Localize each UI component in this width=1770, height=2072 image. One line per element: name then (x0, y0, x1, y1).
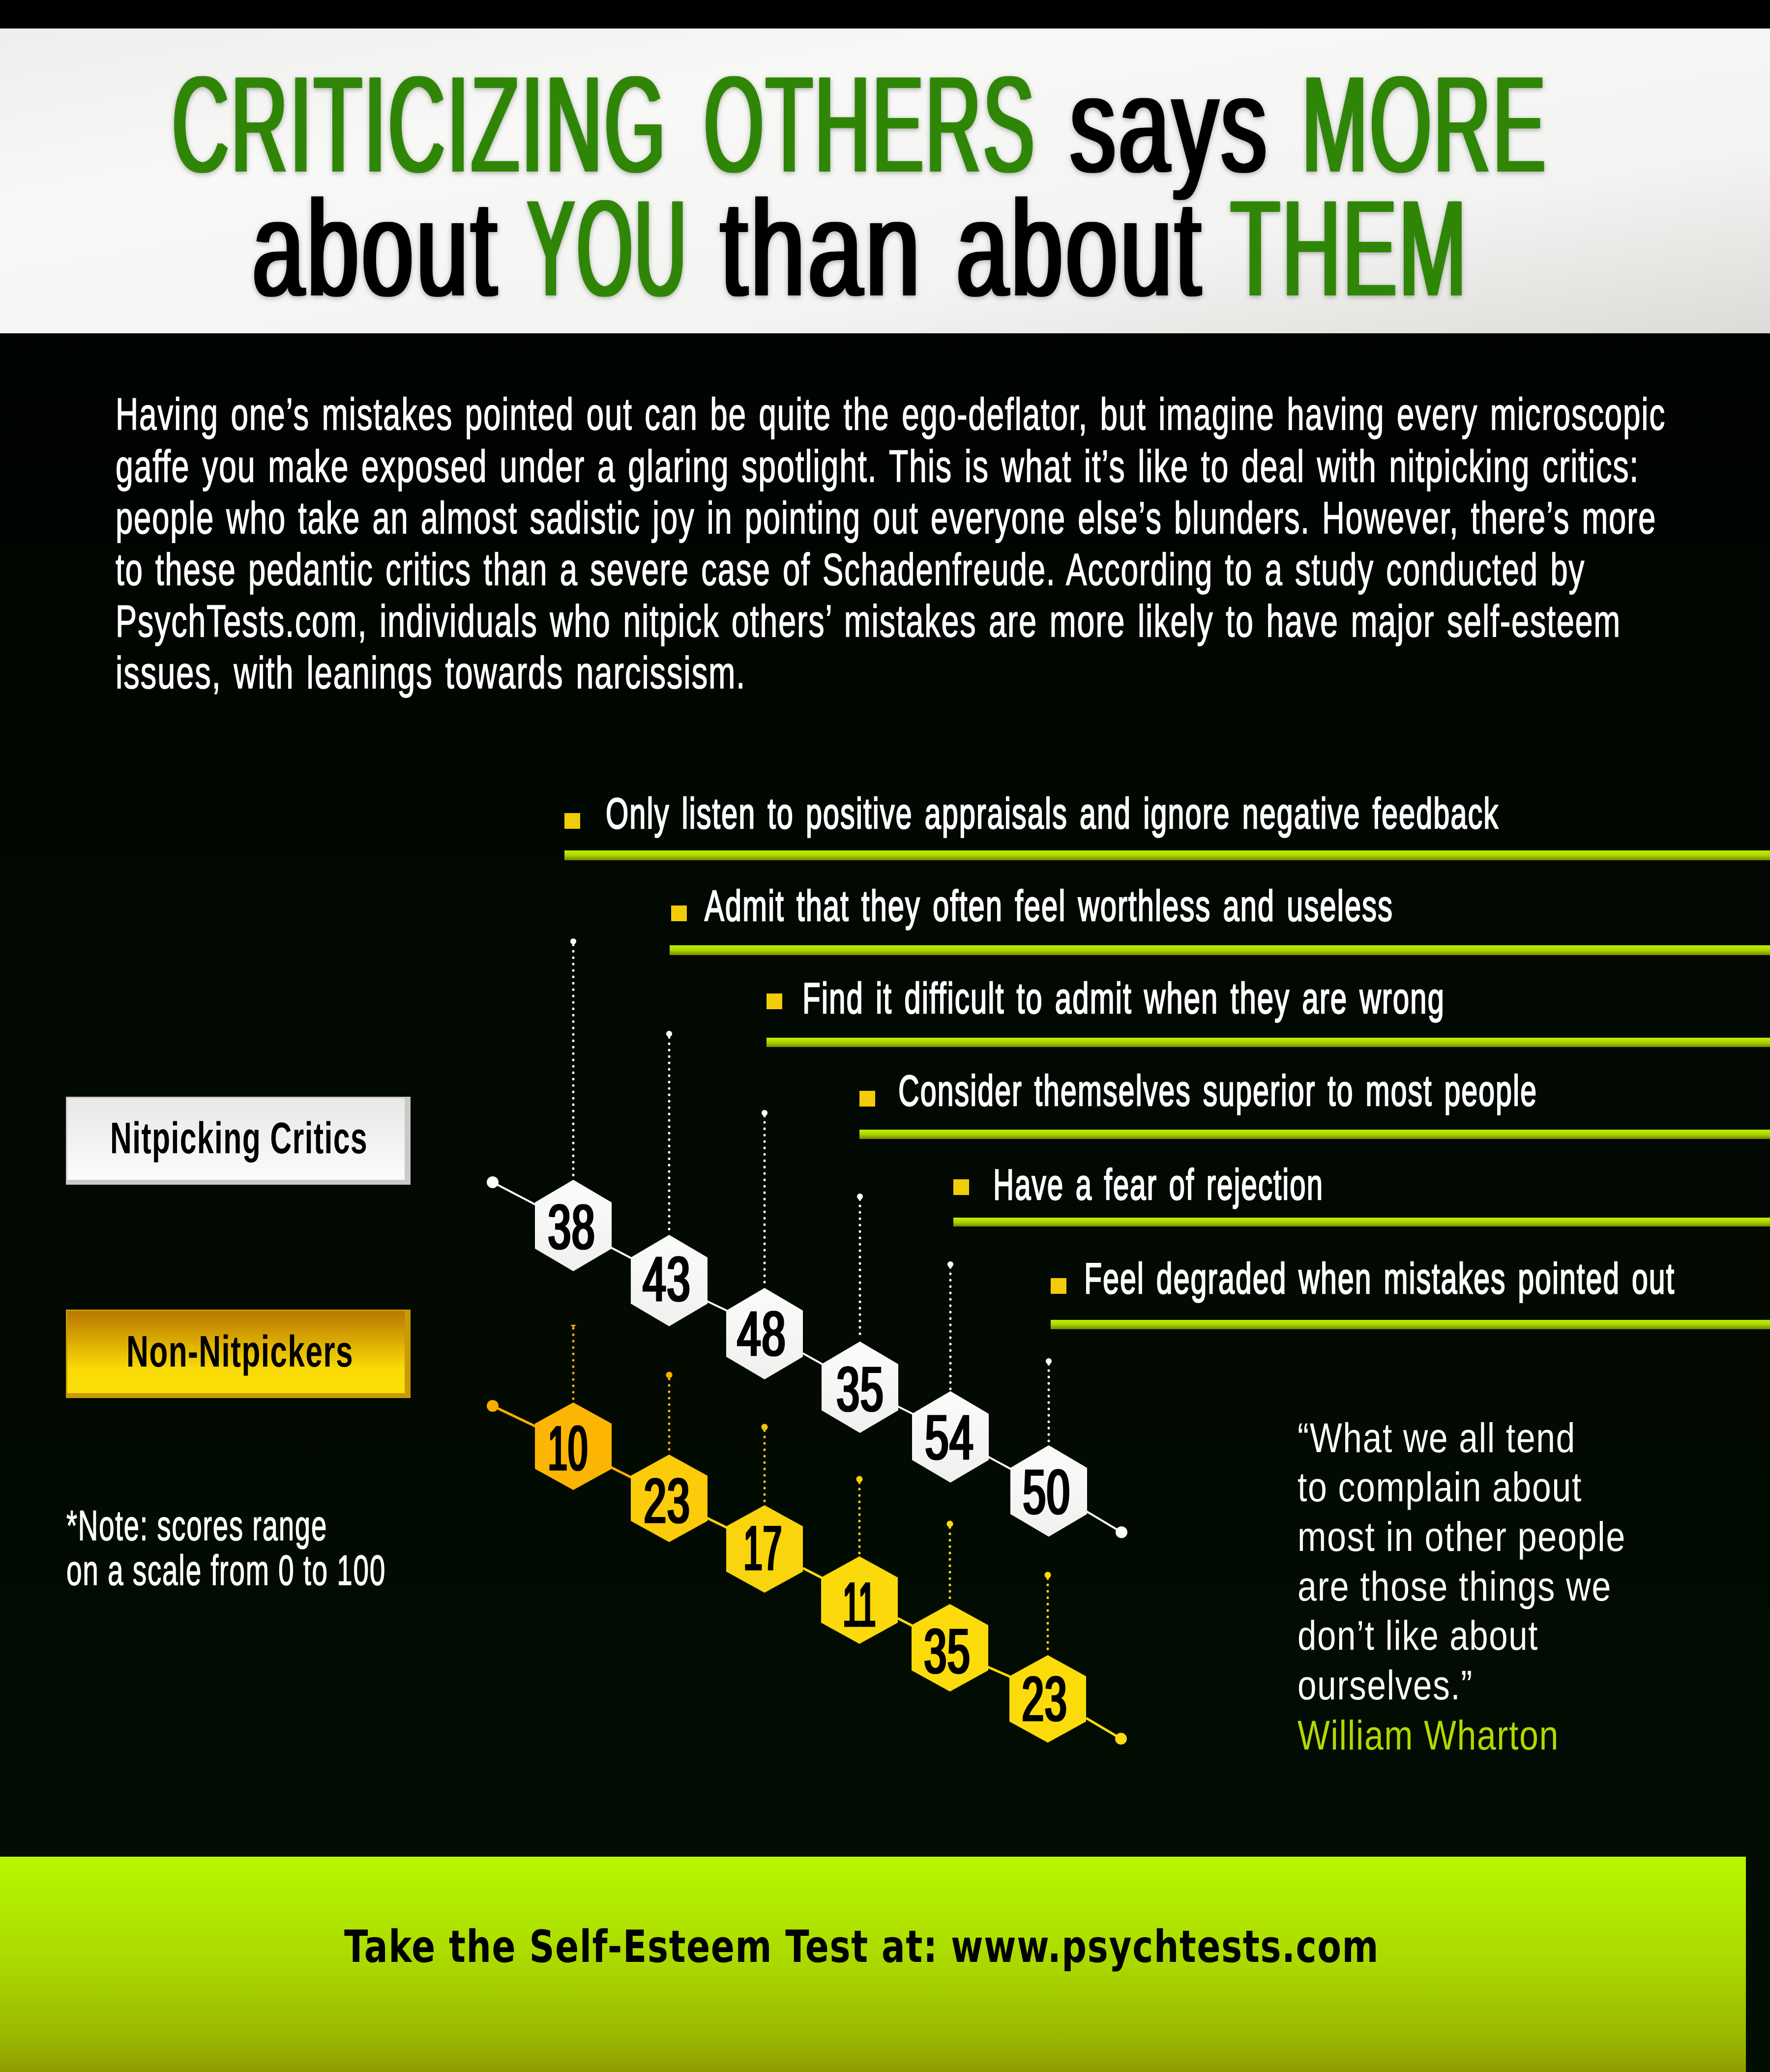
hexagon: 35 (912, 1604, 988, 1692)
hexagon: 43 (631, 1235, 708, 1326)
scale note: *Note: scores range (66, 1502, 327, 1549)
title text: YOU (527, 172, 688, 324)
title text: OTHERS (704, 48, 1036, 201)
title text: CRITICIZING (172, 48, 668, 201)
hexagon: 54 (912, 1391, 989, 1483)
quote: ourselves.” (1298, 1662, 1473, 1708)
legend: nitpicking critics (66, 1097, 411, 1185)
trait 4 (859, 1066, 1770, 1139)
footer banner (0, 1857, 1746, 2072)
hexagon: 35 (822, 1342, 898, 1433)
legend: nitpicking critics: Nitpicking Critics (110, 1114, 368, 1163)
scale note (66, 1502, 386, 1594)
title text (172, 48, 1548, 324)
title text: THEM (1231, 172, 1469, 324)
scale note: on a scale from 0 to 100 (66, 1547, 386, 1594)
hexagon: 23: 23 (1022, 1664, 1068, 1734)
trait 1 (564, 789, 1770, 860)
chart: non-nitpickers series (487, 1325, 1127, 1745)
hexagon: 23: 23 (644, 1466, 691, 1536)
quote: are those things we (1298, 1563, 1612, 1609)
hexagon: 48 (726, 1288, 803, 1379)
intro paragraph (116, 389, 1666, 698)
trait 6 (1051, 1254, 1770, 1329)
quote: “What we all tend (1298, 1415, 1576, 1461)
quote (1298, 1415, 1626, 1758)
call to action: Take the Self-Esteem Test at: www.psychtests.com (344, 1921, 1379, 1973)
hexagon: 23 (1009, 1655, 1086, 1743)
title banner (0, 29, 1770, 333)
intro paragraph: issues, with leanings towards narcissism. (116, 648, 746, 698)
hexagon: 17 (726, 1505, 803, 1593)
quote: most in other people (1298, 1514, 1626, 1560)
hexagon: 23 (631, 1455, 708, 1542)
hexagon: 35: 35 (924, 1616, 971, 1686)
quote: to complain about (1298, 1464, 1582, 1510)
hexagon: 10 (535, 1402, 612, 1490)
quote: don’t like about (1298, 1612, 1538, 1659)
legend: non-nitpickers (66, 1310, 411, 1398)
hexagon: 10: 10 (548, 1413, 589, 1483)
title text: than (720, 172, 923, 324)
trait 5: Have a fear of rejection (993, 1160, 1324, 1209)
hexagon: 48: 48 (738, 1299, 787, 1369)
hexagon: 54: 54 (925, 1402, 974, 1472)
title text: about (252, 172, 500, 324)
trait 2: Admit that they often feel worthless and useless (705, 881, 1393, 930)
hexagon: 38 (535, 1180, 612, 1271)
title text: about (956, 172, 1204, 324)
trait 5 (953, 1160, 1770, 1226)
legend: non-nitpickers: Non-Nitpickers (126, 1327, 354, 1376)
hexagon: 35: 35 (837, 1354, 885, 1424)
chart: nitpicking critics series (487, 938, 1127, 1538)
hexagon: 38: 38 (548, 1192, 596, 1262)
trait 3 (767, 974, 1770, 1047)
title text: says (1070, 48, 1269, 202)
hexagon: 11 (821, 1556, 898, 1644)
trait 2 (670, 881, 1770, 955)
trait 3: Find it difficult to admit when they are wrong (802, 974, 1445, 1022)
quote attribution: William Wharton (1298, 1712, 1559, 1758)
traits list (564, 789, 1770, 1329)
title text: MORE (1302, 48, 1548, 201)
hexagon: 50 (1010, 1445, 1087, 1537)
hexagon: 43: 43 (643, 1244, 691, 1314)
hexagon: 50: 50 (1023, 1457, 1071, 1527)
hexagon: 11: 11 (843, 1570, 877, 1639)
hexagon: 17: 17 (744, 1513, 783, 1583)
